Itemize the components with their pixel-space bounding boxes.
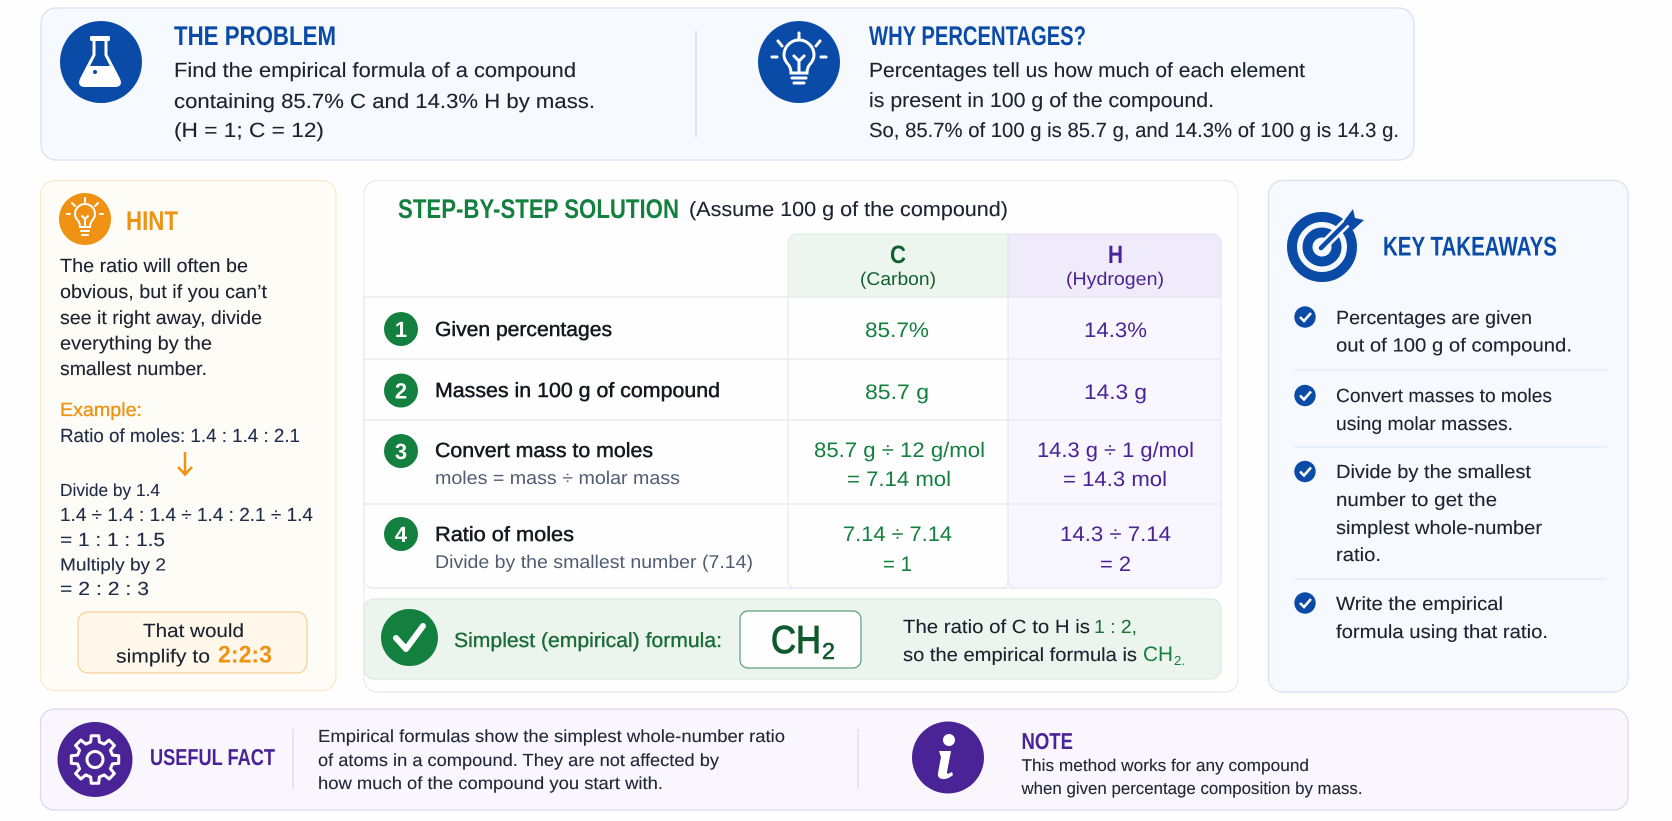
- formula box: CH2: 2: [822, 638, 835, 664]
- text: useful fact: Empirical formulas show the simplest whole-number ratio: [318, 726, 785, 746]
- text: problem statement: containing 85.7% C and 14.3% H by mass.: [174, 90, 595, 113]
- text: problem statement: [174, 59, 595, 142]
- icon: check mark: [381, 609, 438, 666]
- row 3: convert to moles: [384, 434, 1194, 491]
- takeaway 3: Divide by the smallest: [1336, 462, 1532, 483]
- heading: key takeaways: KEY TAKEAWAYS: [1383, 232, 1557, 262]
- text: useful fact: of atoms in a compound. They are not affected by: [318, 750, 719, 770]
- row 3: convert to moles: 85.7 g ÷ 12 g/mol: [814, 439, 985, 462]
- callout: simplify to 2:2:3: [78, 612, 307, 673]
- takeaway 2: using molar masses.: [1336, 414, 1513, 435]
- row 4: ratio of moles: = 1: [883, 553, 912, 576]
- takeaway 3: ratio.: [1336, 545, 1381, 566]
- row 2: masses: 14.3 g: [1084, 381, 1147, 404]
- heading: step-by-step solution: [398, 194, 1008, 224]
- takeaway 1: out of 100 g of compound.: [1336, 336, 1572, 356]
- text: useful fact: how much of the compound you start with.: [318, 773, 663, 793]
- text: formula explanation: 1 : 2,: [1094, 617, 1137, 638]
- text: worked example: Multiply by 2: [60, 554, 166, 574]
- takeaway 4: Write the empirical: [1336, 594, 1503, 615]
- row 1: given percentages: 14.3%: [1084, 319, 1147, 342]
- heading: hint: HINT: [126, 206, 178, 236]
- text: formula explanation: 2.: [1174, 653, 1185, 668]
- row 4: ratio of moles: 4: [395, 522, 408, 547]
- text: example label: Example:: [60, 400, 142, 421]
- takeaway 3: number to get the: [1336, 490, 1497, 511]
- arrow: down: [178, 452, 192, 474]
- heading: step-by-step solution: STEP-BY-STEP SOLUTION: [398, 194, 679, 224]
- formula box: CH2: CH: [771, 619, 821, 662]
- icon: info: [912, 722, 984, 794]
- text: useful fact: [318, 726, 785, 793]
- takeaway 4: [1294, 592, 1548, 643]
- panel: hint: [40, 180, 336, 690]
- column header: carbon: [788, 234, 1008, 297]
- icon: flask: [60, 21, 142, 103]
- text: formula explanation: CH: [1143, 643, 1173, 666]
- heading: the problem: THE PROBLEM: [174, 21, 336, 51]
- text: note: [1021, 756, 1362, 798]
- takeaway 1: [1294, 306, 1572, 356]
- column header: hydrogen: [1008, 234, 1221, 297]
- row 3: convert to moles: = 14.3 mol: [1063, 468, 1167, 491]
- text: hint body: smallest number.: [60, 359, 207, 380]
- row 3: convert to moles: moles = mass ÷ molar mass: [435, 467, 680, 488]
- takeaway 1: Percentages are given: [1336, 308, 1532, 329]
- takeaway 3: simplest whole-number: [1336, 518, 1543, 539]
- row 2: masses: 2: [395, 378, 407, 404]
- text: hint body: obvious, but if you can’t: [60, 282, 268, 303]
- text: hint body: everything by the: [60, 334, 212, 354]
- text: hint body: see it right away, divide: [60, 308, 262, 329]
- row 4: ratio of moles: Divide by the smallest number (7.14): [435, 551, 753, 572]
- row 1: given percentages: [384, 312, 1147, 346]
- panel: useful fact and note: [40, 709, 1628, 810]
- text: ratio of moles: Ratio of moles: 1.4 : 1.4 : 2.1: [60, 426, 300, 447]
- heading: useful fact: USEFUL FACT: [150, 744, 275, 770]
- row 4: ratio of moles: 7.14 ÷ 7.14: [843, 523, 952, 546]
- row 4: ratio of moles: = 2: [1100, 553, 1131, 576]
- column header: hydrogen: (Hydrogen): [1066, 268, 1164, 289]
- callout: simplify to 2:2:3: 2:2:3: [218, 642, 272, 668]
- panel: problem and why percentages: [41, 8, 1414, 160]
- label: simplest formula: Simplest (empirical) formula:: [454, 629, 722, 652]
- row 1: given percentages: 1: [395, 317, 407, 342]
- text: note: when given percentage composition by mass.: [1021, 779, 1362, 798]
- column header: carbon: C: [890, 241, 906, 269]
- text: hint body: [60, 256, 268, 380]
- panel: key takeaways: [1268, 180, 1628, 692]
- icon: hint bulb: [59, 193, 111, 245]
- text: formula explanation: [903, 617, 1185, 668]
- column header: carbon: (Carbon): [860, 268, 936, 289]
- heading: note: NOTE: [1022, 728, 1073, 754]
- result bar: simplest formula: [364, 599, 1221, 679]
- takeaway 2: [1294, 385, 1552, 435]
- text: why percentages explanation: [869, 59, 1399, 142]
- text: worked example: = 2 : 2 : 3: [60, 579, 149, 600]
- callout: simplify to 2:2:3: That would: [143, 621, 244, 642]
- icon: light bulb: [758, 21, 840, 103]
- text: worked example: Divide by 1.4: [60, 480, 160, 500]
- panel: step-by-step solution: [364, 180, 1238, 692]
- text: formula explanation: so the empirical formula is: [903, 645, 1137, 666]
- row 4: ratio of moles: Ratio of moles: [435, 523, 574, 546]
- row 1: given percentages: Given percentages: [435, 318, 612, 341]
- row 2: masses: Masses in 100 g of compound: [435, 379, 720, 402]
- row 3: convert to moles: 3: [395, 439, 407, 464]
- text: note: This method works for any compound: [1022, 756, 1309, 775]
- text: why percentages explanation: Percentages tell us how much of each element: [869, 59, 1305, 82]
- column header: hydrogen: H: [1108, 241, 1123, 269]
- text: problem statement: (H = 1; C = 12): [174, 119, 324, 142]
- heading: why percentages: WHY PERCENTAGES?: [869, 21, 1086, 51]
- row 2: masses: 85.7 g: [865, 381, 929, 404]
- text: formula explanation: The ratio of C to H is: [903, 617, 1090, 638]
- row 4: ratio of moles: [384, 517, 1171, 576]
- text: worked example: 1.4 ÷ 1.4 : 1.4 ÷ 1.4 : 2.1 ÷ 1.4: [60, 505, 313, 526]
- text: problem statement: Find the empirical formula of a compound: [174, 59, 576, 82]
- row 4: ratio of moles: 14.3 ÷ 7.14: [1060, 523, 1171, 546]
- text: why percentages explanation: So, 85.7% of 100 g is 85.7 g, and 14.3% of 100 g is 14.3 g.: [869, 119, 1399, 142]
- text: worked example: [60, 480, 313, 600]
- icon: target: [1292, 209, 1364, 277]
- row 1: given percentages: 85.7%: [865, 319, 929, 342]
- text: why percentages explanation: is present in 100 g of the compound.: [869, 89, 1214, 112]
- formula box: CH2: [740, 611, 861, 668]
- row 3: convert to moles: 14.3 g ÷ 1 g/mol: [1037, 439, 1194, 462]
- row 3: convert to moles: Convert mass to moles: [435, 439, 653, 462]
- row 2: masses: [384, 374, 1147, 408]
- table: steps: [364, 234, 1221, 588]
- callout: simplify to 2:2:3: simplify to: [116, 646, 210, 668]
- row 3: convert to moles: = 7.14 mol: [847, 468, 951, 491]
- takeaway 4: formula using that ratio.: [1336, 622, 1548, 643]
- text: hint body: The ratio will often be: [60, 256, 248, 277]
- icon: gear: [58, 722, 132, 797]
- heading: step-by-step solution: (Assume 100 g of the compound): [689, 198, 1008, 221]
- text: worked example: = 1 : 1 : 1.5: [60, 530, 165, 551]
- takeaway 2: Convert masses to moles: [1336, 386, 1552, 407]
- takeaway 3: [1294, 461, 1543, 566]
